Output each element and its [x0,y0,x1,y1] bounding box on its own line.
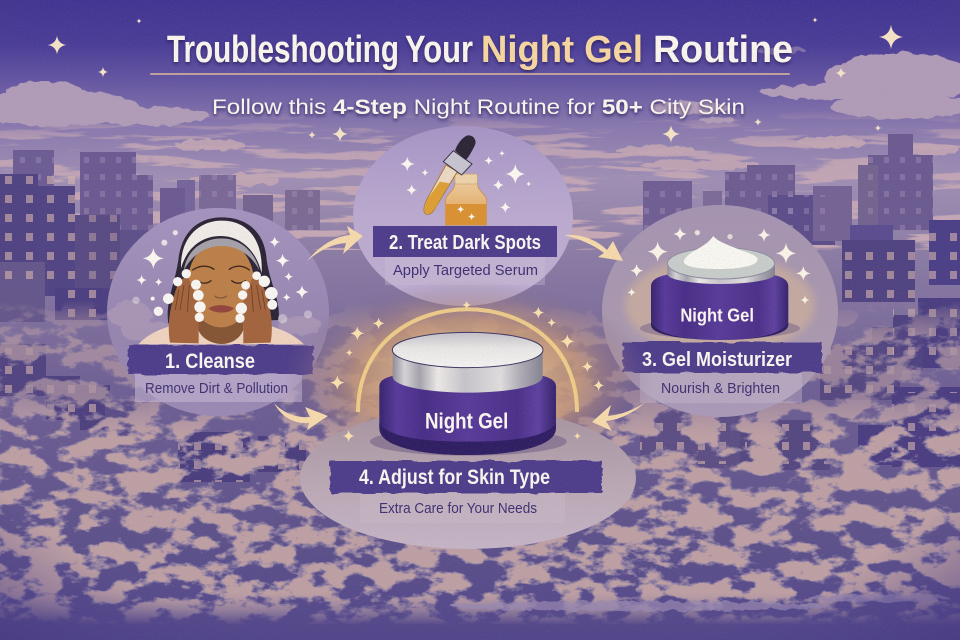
panel: step 3 gel moisturizer [602,205,838,417]
sparkles [628,227,811,304]
icon: night gel jar with cream [628,227,811,340]
foam [154,269,278,323]
step 1 caption: Remove Dirt & Pollution [145,380,288,397]
caption band: step 3 [640,373,802,403]
glow arc [358,309,577,412]
illustration: woman cleansing face [132,217,312,344]
icon: large night gel jar [330,301,604,456]
sparkles [400,150,531,220]
icon: serum bottle and dropper [400,135,531,225]
step 3 heading: 3. Gel Moisturizer [642,349,792,371]
step 3 caption: Nourish & Brighten [661,380,780,397]
sky cloud streaks [0,110,960,250]
jar label: Night Gel [425,408,508,433]
facial features [193,266,249,298]
label banner: step 3 [623,342,822,373]
label banner: step 4 [330,461,602,493]
caption band: step 2 [385,257,545,285]
title: Troubleshooting [167,29,399,71]
title: Night Gel [481,29,643,71]
arrow: step 3 to step 4 [592,402,646,431]
hands [169,278,199,343]
label banner: step 1 [128,345,313,374]
arrow: step 2 to step 3 [564,235,623,261]
warm glow behind jar [625,255,815,355]
step 2 heading: 2. Treat Dark Spots [389,232,541,254]
stars in sky [48,17,903,143]
panel: step 2 treat dark spots [353,126,573,306]
bottom haze [450,594,950,611]
city skyline: near buildings [0,174,960,482]
panel: step 4 adjust for skin type [283,280,653,549]
step 4 caption: Extra Care for Your Needs [379,500,537,517]
golden glow [283,280,653,480]
lower cloud bed: shaded layer [0,300,960,625]
city skyline: far buildings [13,134,933,245]
caption band: step 4 [360,493,565,523]
label banner: step 2 [373,226,557,257]
step 4 heading: 4. Adjust for Skin Type [359,466,550,489]
arrow: step 1 to step 4 [274,403,328,430]
sparkles [330,301,604,442]
title underline [150,73,790,75]
jar label: Night Gel [680,304,754,325]
arrow: step 1 to step 2 [307,226,363,261]
step 1 heading: 1. Cleanse [165,350,255,373]
title: Routine [653,29,793,71]
sparkles [132,230,312,323]
title: Your [405,29,473,71]
step 2 caption: Apply Targeted Serum [393,262,538,279]
panel: step 1 cleanse [107,208,329,416]
caption band: step 1 [135,374,302,402]
title [167,29,793,71]
lower cloud bed: highlight layer [0,300,960,625]
faint clouds inside circle [108,301,322,342]
subtitle: Follow this 4-Step Night Routine for 50+ City Skin [212,96,745,119]
upper sky clouds [0,46,960,186]
